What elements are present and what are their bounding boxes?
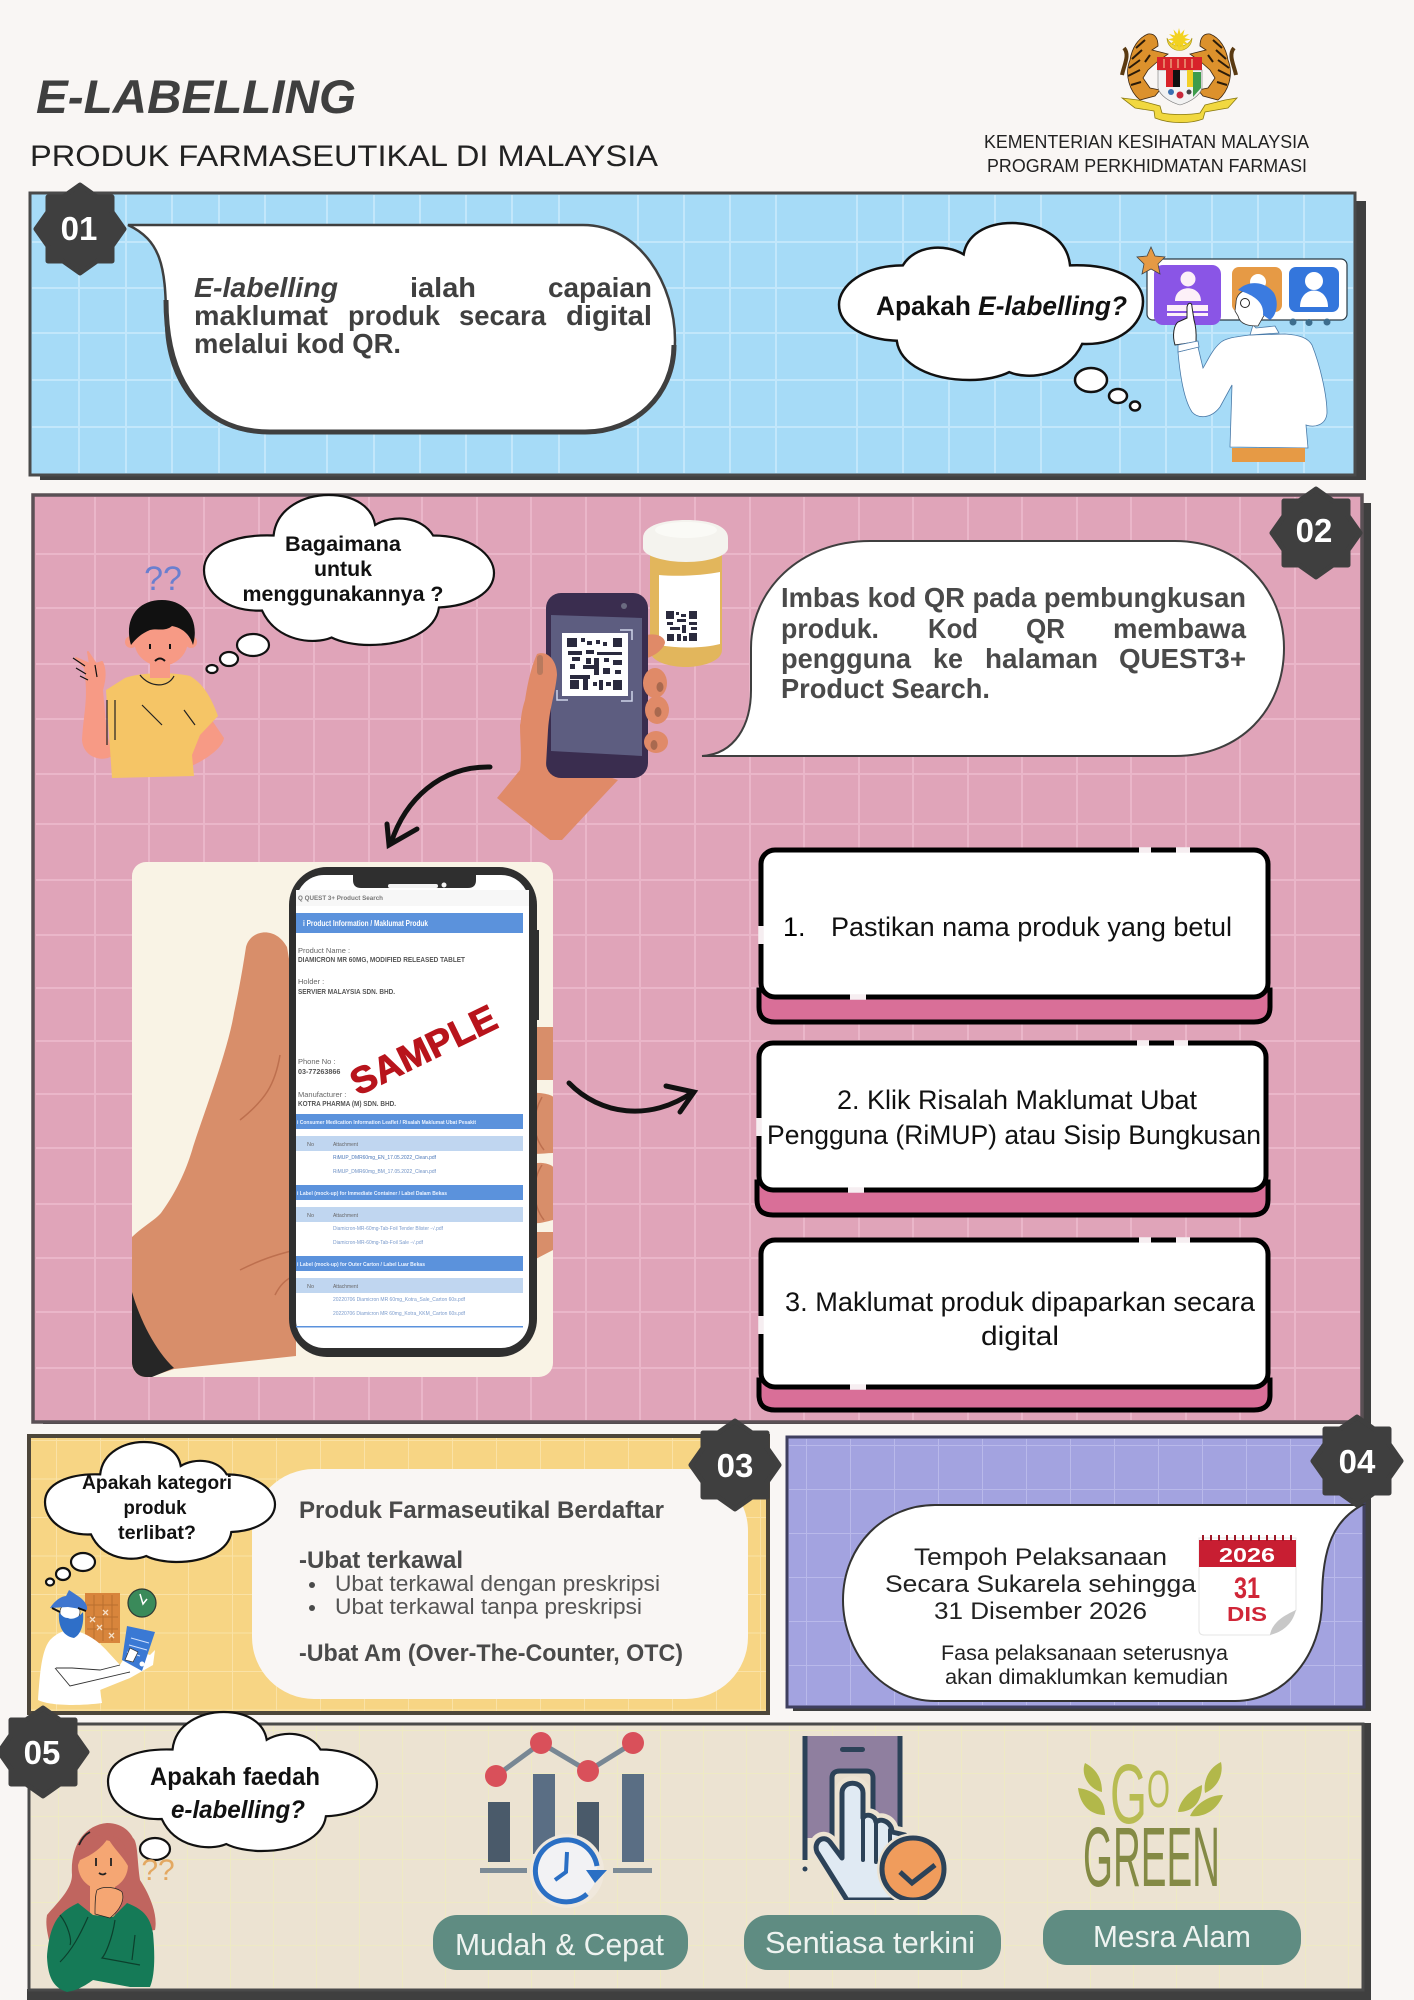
SAMPLE stamp: SAMPLE <box>344 997 504 1103</box>
badge 04 <box>1313 1417 1401 1505</box>
icon: Go Green: G <box>1110 1747 1175 1841</box>
phone screen: product page: RiMUP_DMR60mg_EN_17.05.2022_Clean.pdf <box>333 1155 437 1161</box>
phone screen: product page: i Consumer Medication Information Leaflet / Risalah Maklumat Ubat Pesakit <box>297 1120 476 1126</box>
scan instruction text: Kod <box>928 613 978 644</box>
icon: calendar <box>1199 1535 1296 1635</box>
implementation text: 31 Disember 2026 <box>934 1598 1147 1625</box>
cloud question text <box>242 533 444 606</box>
phone screen: product page: Attachment <box>333 1213 358 1219</box>
card: registered products: -Ubat terkawal <box>299 1547 463 1574</box>
phone screen: product page: RiMUP_DMR60mg_BM_17.05.2022_Clean.pdf <box>333 1169 437 1175</box>
icon: Go Green <box>1078 1747 1223 1904</box>
phone frame <box>289 867 537 1357</box>
implementation text: Tempoh Pelaksanaan <box>914 1544 1167 1571</box>
card: registered products: Ubat terkawal dengan preskripsi <box>335 1571 660 1596</box>
badge 01: 01 <box>61 210 97 247</box>
phone screen: product page <box>296 890 529 1328</box>
illustration: person touching profile screen <box>1137 247 1347 462</box>
icon: Malaysian coat of arms logo <box>1122 28 1237 123</box>
scan instruction text <box>781 582 1247 704</box>
card: hand holding phone <box>132 862 553 1377</box>
step 1 box <box>759 850 1270 1022</box>
phone screen: product page: SERVIER MALAYSIA SDN. BHD. <box>298 987 395 996</box>
ministry name: KEMENTERIAN KESIHATAN MALAYSIA <box>984 131 1310 152</box>
speech bubble: definition <box>128 225 675 433</box>
badge 02 <box>1272 489 1360 577</box>
cloud question text <box>82 1472 232 1544</box>
subtitle: PRODUK FARMASEUTIKAL DI MALAYSIA <box>30 140 658 173</box>
cloud question text: Apakah faedah <box>150 1763 320 1791</box>
pill: Mudah & Cepat <box>433 1915 688 1970</box>
panel 01: what is e-labelling <box>30 185 1366 480</box>
cloud question text: Bagaimana <box>285 533 401 556</box>
illustration: confused boy <box>73 600 224 778</box>
definition text: maklumat <box>194 300 328 331</box>
step 3 box: digital <box>981 1321 1059 1351</box>
phone screen: product page: Attachment <box>333 1284 358 1290</box>
pill: Mudah & Cepat: Mudah & Cepat <box>455 1927 664 1962</box>
cloud question text: e-labelling? <box>171 1796 305 1824</box>
phone screen: product page: Product Name : <box>298 946 350 955</box>
ministry name: PROGRAM PERKHIDMATAN FARMASI <box>987 155 1307 176</box>
cloud question text: menggunakannya ? <box>242 583 444 606</box>
badge 02: 02 <box>1296 512 1332 549</box>
thought cloud: Apakah E-labelling? <box>839 223 1143 410</box>
speech bubble: scan instruction <box>702 541 1284 756</box>
thought cloud: how to use <box>204 495 494 673</box>
step 2 box: Pengguna (RiMUP) atau Sisip Bungkusan <box>767 1120 1261 1150</box>
phone screen: product page: Phone No : <box>298 1057 336 1066</box>
arrow: scan to phone <box>387 767 490 845</box>
cloud question text <box>150 1763 320 1824</box>
panel 05: benefits: GREEN <box>1083 1810 1220 1904</box>
phone screen: product page: Diamicron-MR-60mg-Tab-Foil Sale -√.pdf <box>333 1239 424 1246</box>
scan instruction text: pengguna <box>781 643 912 674</box>
panel 03: product categories <box>29 1421 779 1713</box>
icon: Go Green: O <box>1147 1761 1170 1819</box>
illustration: hand holding phone scanning QR <box>497 593 669 840</box>
phone screen: product page: Q QUEST 3+ Product Search <box>298 895 383 902</box>
pill: Sentiasa terkini: Sentiasa terkini <box>765 1925 975 1960</box>
title: E-LABELLING <box>36 70 356 123</box>
hand with thumb <box>132 932 296 1377</box>
phone screen: product page: 20220706 Diamicron MR 60mg_Kotra_Sale_Carton 60s.pdf <box>333 1297 466 1303</box>
card: registered products: Produk Farmaseutikal Berdaftar <box>299 1497 664 1524</box>
pill: Mesra Alam: Mesra Alam <box>1093 1919 1251 1954</box>
phone screen: product page: i Label (mock-up) for Immediate Container / Label Dalam Bekas <box>297 1191 447 1197</box>
cloud question: Apakah E-labelling? <box>876 291 1127 321</box>
definition text: ialah <box>410 272 476 303</box>
card: registered products: -Ubat Am (Over-The-Counter, OTC) <box>299 1640 683 1667</box>
scan instruction text: Imbas kod QR pada pembungkusan <box>781 582 1246 613</box>
thought cloud: categories <box>45 1442 275 1586</box>
phone screen: product page: Holder : <box>298 977 324 986</box>
icon: calendar: DIS <box>1227 1604 1267 1626</box>
right tiger <box>1190 34 1236 100</box>
question marks: ?? <box>144 560 182 598</box>
definition text: secara <box>459 300 547 331</box>
pill: Mesra Alam <box>1043 1910 1301 1965</box>
scan instruction text: produk. <box>781 613 879 644</box>
phone screen: product page: No <box>307 1284 314 1290</box>
illustration: man with checklist <box>38 1589 156 1705</box>
scan instruction text: QR <box>1026 613 1065 644</box>
icon: calendar: 31 <box>1234 1572 1260 1605</box>
definition text <box>194 272 652 359</box>
panel 02: how to use <box>33 489 1371 1424</box>
phone screen: product page: i Label (mock-up) for Outer Carton / Label Luar Bekas <box>297 1262 425 1268</box>
icon: calendar: 2026 <box>1219 1545 1275 1567</box>
step 1 box: Pastikan nama produk yang betul <box>831 912 1232 942</box>
question marks orange: ?? <box>141 1854 175 1887</box>
shield <box>1157 57 1202 105</box>
illustration: thinking woman <box>46 1823 156 1992</box>
definition text: digital <box>566 300 652 331</box>
implementation text: Secara Sukarela sehingga <box>885 1571 1197 1598</box>
cloud question text: terlibat? <box>118 1522 196 1544</box>
badge 03 <box>691 1421 779 1509</box>
pill: Sentiasa terkini <box>744 1915 1001 1970</box>
step 2 box: 2. Klik Risalah Maklumat Ubat <box>837 1085 1197 1115</box>
ribbon <box>1122 98 1237 123</box>
scan instruction text: ke <box>933 643 963 674</box>
card: registered products <box>252 1469 748 1699</box>
step 3 box <box>759 1240 1270 1410</box>
left tiger <box>1122 34 1168 100</box>
phone screen: product page: No <box>307 1213 314 1219</box>
badge 04: 04 <box>1339 1443 1376 1480</box>
cloud question text: produk <box>124 1497 187 1519</box>
phone screen: product page: Attachment <box>333 1142 358 1148</box>
illustration: medicine bottle with QR <box>643 520 728 667</box>
definition text: produk <box>348 300 441 331</box>
crest: sun and crescent <box>1167 28 1192 51</box>
definition text: E-labelling <box>194 272 338 303</box>
phone screen: product page: Manufacturer : <box>298 1090 346 1099</box>
phone screen: product page: Diamicron-MR-60mg-Tab-Foil Tender Blister -√.pdf <box>333 1225 444 1232</box>
phone screen: product page: 03-77263866 <box>298 1067 340 1076</box>
phone screen: product page: i Product Information / Maklumat Produk <box>303 919 428 928</box>
step 1 box: 1. <box>783 912 806 942</box>
definition text: capaian <box>548 272 652 303</box>
cloud question text: untuk <box>314 558 372 581</box>
step 3 box: 3. Maklumat produk dipaparkan secara <box>785 1287 1256 1317</box>
scan instruction text: membawa <box>1113 613 1247 644</box>
phone screen: product page: 20220706 Diamicron MR 60mg_Kotra_KKM_Carton 60s.pdf <box>333 1311 466 1317</box>
scan instruction text: Product Search. <box>781 673 990 704</box>
phone screen: product page: No <box>307 1142 314 1148</box>
phone screen: product page: DIAMICRON MR 60MG, MODIFIED RELEASED TABLET <box>298 955 466 964</box>
panel 05: benefits <box>0 1708 1371 2000</box>
icon: chart with clock <box>480 1732 652 1908</box>
scan instruction text: halaman <box>985 643 1098 674</box>
step 2 box <box>757 1043 1268 1215</box>
badge 05: 05 <box>24 1734 60 1771</box>
icon: finger tapping with check <box>802 1736 949 1905</box>
definition text: melalui kod QR. <box>194 328 401 359</box>
panel 04: implementation period <box>787 1417 1401 1711</box>
scan instruction text: QUEST3+ <box>1119 643 1246 674</box>
badge 05 <box>0 1708 87 1796</box>
badge 03: 03 <box>717 1447 753 1484</box>
thought cloud: benefits <box>108 1712 377 1860</box>
phone screen: product page: KOTRA PHARMA (M) SDN. BHD. <box>298 1099 396 1108</box>
badge 01 <box>36 185 124 273</box>
card: registered products: Ubat terkawal tanpa preskripsi <box>335 1594 642 1619</box>
cloud question text: Apakah kategori <box>82 1472 232 1494</box>
implementation text: Fasa pelaksanaan seterusnya <box>941 1642 1228 1665</box>
fingers on right <box>530 1027 553 1262</box>
implementation text <box>885 1544 1228 1689</box>
speech bubble: dates <box>843 1505 1362 1701</box>
implementation text: akan dimaklumkan kemudian <box>945 1666 1228 1689</box>
arrow: phone to steps <box>569 1083 694 1112</box>
ministry name <box>984 131 1310 176</box>
